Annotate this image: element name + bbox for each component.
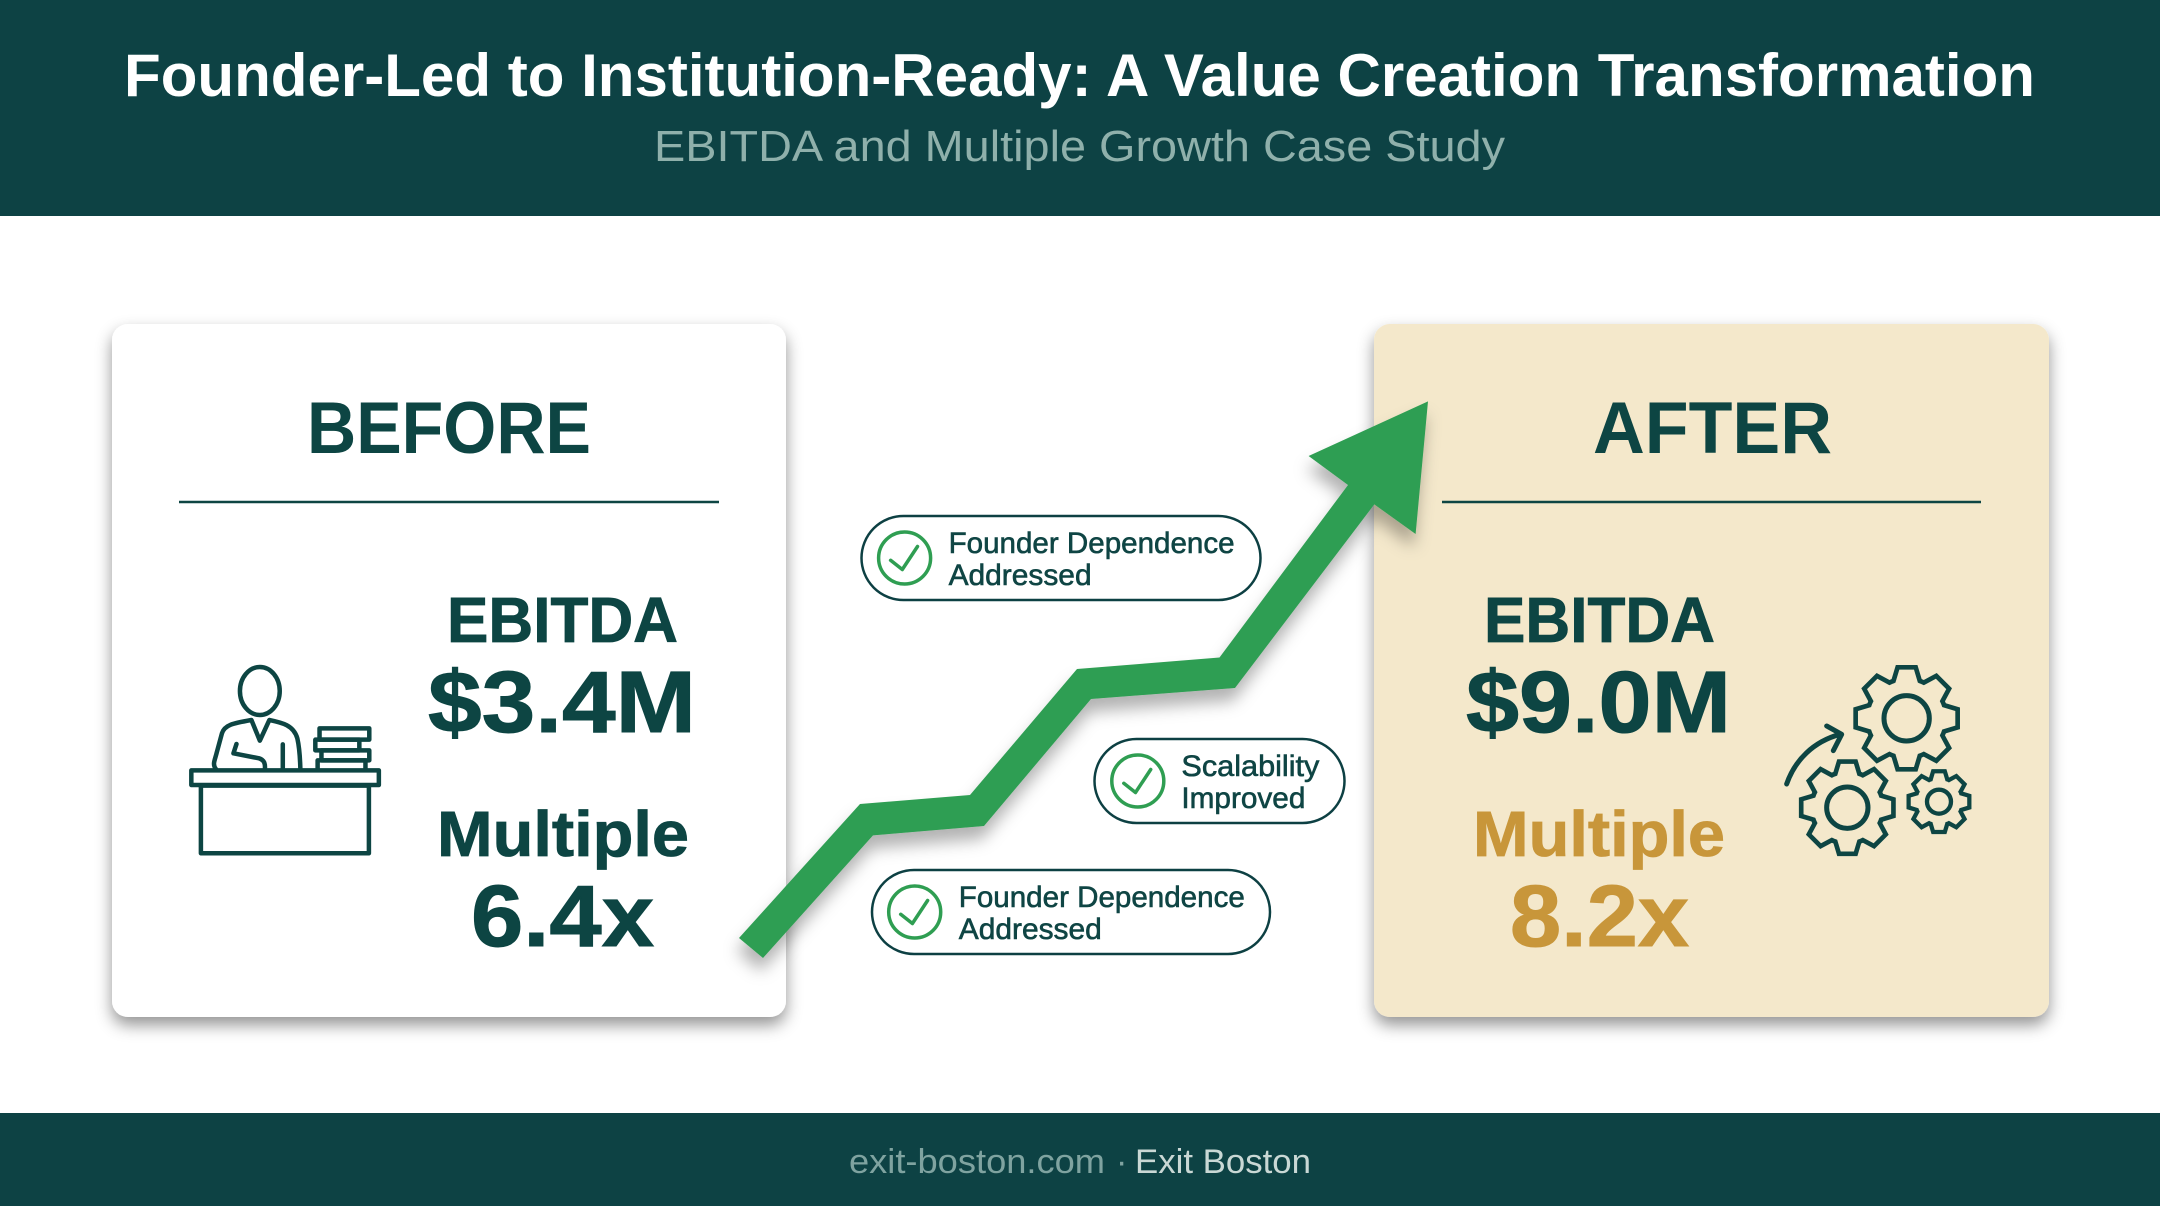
after multiple label: Multiple [1473,798,1725,870]
check icon [889,886,941,938]
pill: founder dependence 2: Addressed [959,913,1102,946]
before multiple label: Multiple [437,798,689,870]
title: Founder-Led to Institution-Ready: A Value Creation Transformation [124,42,2035,109]
before multiple value: 6.4x [471,868,654,965]
pill: founder dependence 1 [862,516,1260,600]
check icon [879,532,931,584]
footer band [0,1113,2160,1206]
icon: gears with arrow [1787,670,1967,851]
header band [0,0,2160,216]
before heading: BEFORE [307,388,591,469]
footer separator: · [1116,1143,1127,1181]
footer brand: Exit Boston [1135,1143,1311,1181]
pill text: Founder Dependence [949,527,1235,560]
after multiple value: 8.2x [1510,868,1689,965]
after heading: AFTER [1593,388,1832,469]
arrow: growth [739,401,1428,958]
pill text: Scalability [1181,750,1319,783]
icon: person at desk [191,667,379,853]
after EBITDA label: EBITDA [1484,584,1715,656]
panel: before [112,324,786,1017]
panel: after [1374,324,2049,1017]
pill: scalability improved [1094,739,1344,823]
pill text: Founder Dependence [959,881,1245,914]
after EBITDA value: $9.0M [1466,654,1731,751]
pill: scalability improved: Improved [1181,782,1305,815]
subtitle: EBITDA and Multiple Growth Case Study [654,122,1505,171]
before EBITDA label: EBITDA [447,584,678,656]
pill: founder dependence 1: Addressed [949,559,1092,592]
footer url: exit-boston.com [849,1143,1105,1181]
pill: founder dependence 2 [872,870,1270,954]
before EBITDA value: $3.4M [428,654,696,751]
check icon [1112,755,1164,807]
